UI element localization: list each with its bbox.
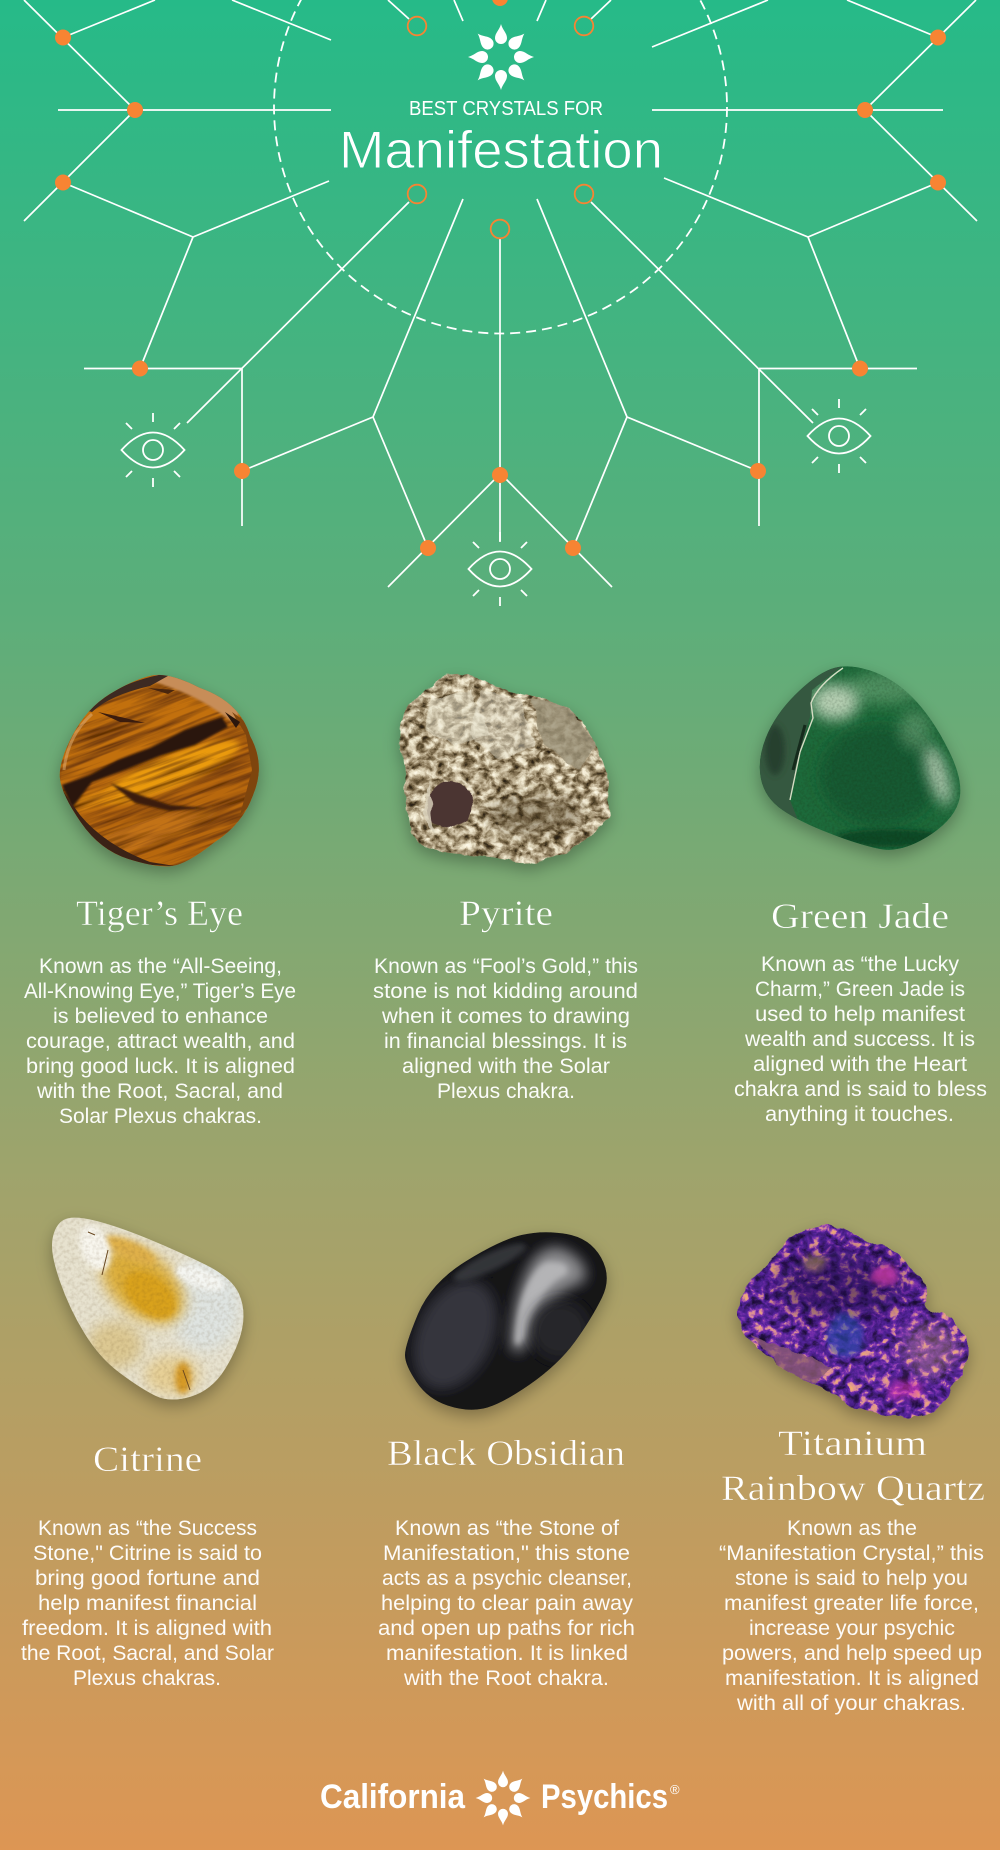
text block — [21, 1517, 274, 1690]
text block: helping to clear pain away — [381, 1592, 634, 1615]
subtitle: BEST CRYSTALS FOR — [409, 98, 603, 120]
text block: “Manifestation Crystal,” this — [719, 1542, 984, 1565]
text block — [378, 1517, 635, 1690]
text block: aligned with the Heart — [753, 1053, 967, 1076]
panel: green jade — [734, 655, 987, 1126]
icon: eye center — [468, 532, 532, 606]
text block: Known as the — [787, 1517, 917, 1540]
text block: Known as “the Lucky — [761, 953, 960, 976]
text block: stone is said to help you — [735, 1567, 968, 1590]
text block: Known as “Fool’s Gold,” this — [374, 955, 638, 978]
network lines — [24, 0, 977, 587]
heading: Citrine — [93, 1439, 202, 1479]
text block: Known as “the Success — [38, 1517, 257, 1540]
heading: Titanium — [778, 1423, 927, 1463]
footer logo — [320, 1771, 680, 1825]
text block: used to help manifest — [755, 1003, 965, 1026]
text block: bring good fortune and — [35, 1567, 260, 1590]
text block: with all of your chakras. — [736, 1692, 966, 1715]
heading: Tiger’s Eye — [76, 893, 243, 933]
text block — [719, 1517, 984, 1715]
text block: Plexus chakra. — [437, 1080, 575, 1103]
text block: Charm,” Green Jade is — [755, 978, 965, 1001]
text block: Known as “the Stone of — [395, 1517, 619, 1540]
text block: aligned with the Solar — [402, 1055, 610, 1078]
image: titanium quartz stone — [730, 1218, 975, 1426]
text block: when it comes to drawing — [381, 1005, 630, 1028]
text block: courage, attract wealth, and — [26, 1030, 295, 1053]
image: tiger's eye stone — [52, 674, 266, 880]
text block: with the Root, Sacral, and — [36, 1080, 283, 1103]
orange dots — [55, 0, 946, 556]
title: Manifestation — [339, 121, 663, 180]
heading: Pyrite — [459, 893, 553, 933]
image: citrine stone — [45, 1210, 255, 1410]
image: green jade stone — [750, 655, 975, 860]
registered mark: ® — [670, 1782, 680, 1797]
text block: bring good luck. It is aligned — [26, 1055, 295, 1078]
orange rings — [408, 17, 593, 238]
text block: All-Knowing Eye,” Tiger’s Eye — [24, 980, 296, 1003]
wordmark: Psychics: Psychics — [541, 1778, 668, 1816]
wordmark: California: California — [320, 1778, 466, 1816]
text block: manifestation. It is linked — [386, 1642, 628, 1665]
text block: Stone," Citrine is said to — [33, 1542, 262, 1565]
dashed circle — [274, 0, 727, 334]
text block: wealth and success. It is — [744, 1028, 975, 1051]
heading: Green Jade — [771, 896, 949, 936]
text block: manifest greater life force, — [724, 1592, 979, 1615]
text block: stone is not kidding around — [373, 980, 638, 1003]
text block: Manifestation," this stone — [383, 1542, 630, 1565]
text block: the Root, Sacral, and Solar — [21, 1642, 274, 1665]
panel: header mandala — [24, 0, 977, 606]
text block: is believed to enhance — [53, 1005, 268, 1028]
text block: with the Root chakra. — [403, 1667, 609, 1690]
text block: chakra and is said to bless — [734, 1078, 987, 1101]
text block: powers, and help speed up — [722, 1642, 982, 1665]
text block: freedom. It is aligned with — [22, 1617, 272, 1640]
text block: acts as a psychic cleanser, — [382, 1567, 632, 1590]
panel: tiger's eye — [24, 674, 296, 1123]
heading: Black Obsidian — [387, 1433, 625, 1473]
text block: in financial blessings. It is — [384, 1030, 627, 1053]
text block — [373, 955, 638, 1103]
icon: sunburst logo — [468, 24, 534, 90]
text block: help manifest financial — [38, 1592, 257, 1615]
panel: pyrite — [373, 660, 638, 1103]
text block: Plexus chakras. — [73, 1667, 221, 1690]
text block: Solar Plexus chakras. — [59, 1105, 262, 1128]
text block: and open up paths for rich — [378, 1617, 635, 1640]
text block: anything it touches. — [765, 1103, 954, 1126]
text block: increase your psychic — [749, 1617, 955, 1640]
text block: Known as the “All-Seeing, — [39, 955, 282, 978]
text block — [24, 955, 296, 1128]
panel: titanium rainbow quartz — [719, 1218, 985, 1715]
heading: Rainbow Quartz — [721, 1468, 985, 1508]
image: pyrite stone — [390, 660, 625, 875]
icon: eye right — [808, 399, 870, 473]
panel: citrine — [21, 1210, 274, 1690]
panel: black obsidian — [378, 1225, 635, 1690]
text block: manifestation. It is aligned — [725, 1667, 979, 1690]
icon: footer sunburst — [476, 1771, 530, 1825]
text block — [734, 953, 987, 1126]
icon: eye left — [122, 413, 184, 487]
image: black obsidian stone — [396, 1225, 620, 1420]
heading — [721, 1423, 985, 1508]
